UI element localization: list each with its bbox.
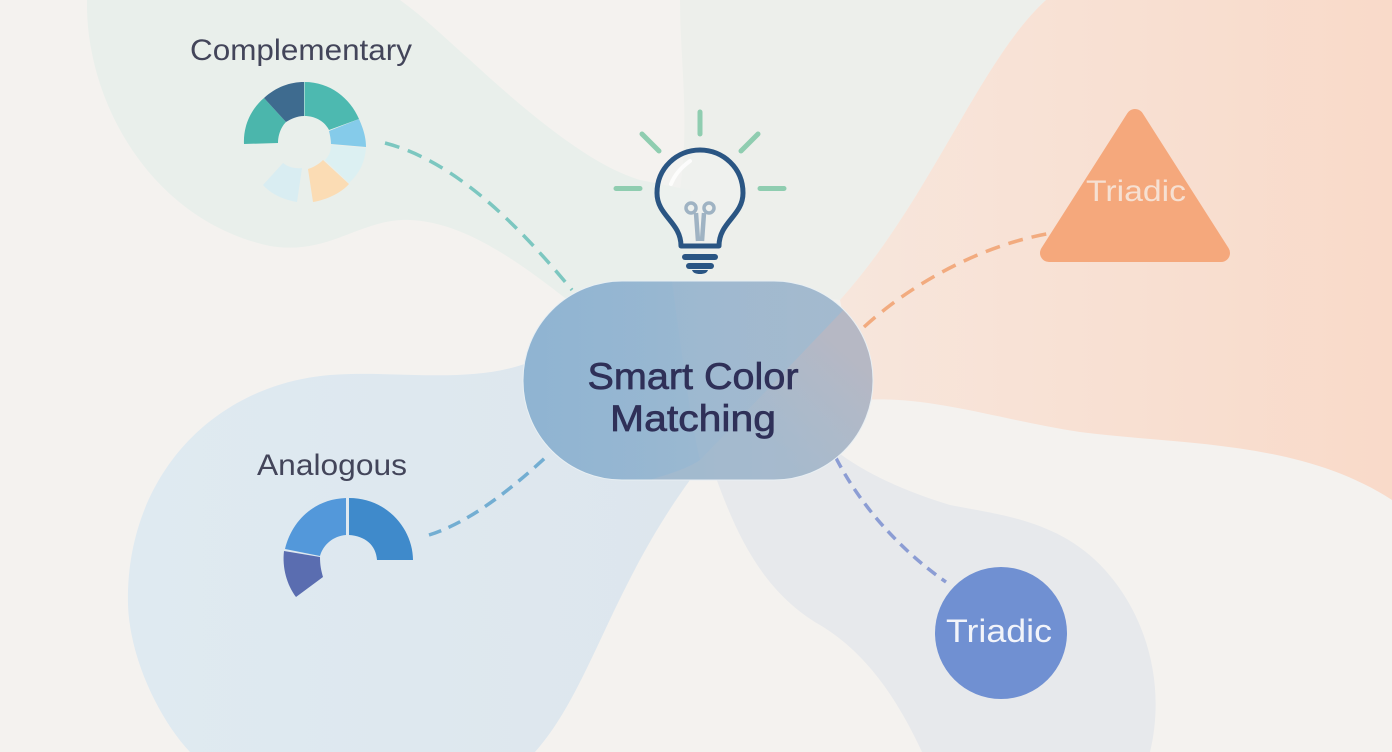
central title [588,356,798,439]
blob: orange right [840,0,1392,500]
node: triadic triangle [1049,118,1221,253]
connector: triadic triangle [864,233,1052,327]
chart: analogous wheel [284,498,413,597]
node: triadic circle [935,567,1067,699]
heading: analogous: Analogous [257,449,407,482]
connector: triadic circle [836,458,946,582]
node: triadic triangle: Triadic [1086,175,1186,208]
central title: Matching [610,398,776,439]
blob: gray-blue bottom right [715,450,1156,752]
chart: complementary wheel [244,82,366,202]
connector: analogous [429,458,545,535]
blob: green top left [87,0,700,300]
central title: Smart Color [588,356,798,397]
node: triadic circle: Triadic [946,613,1052,649]
blob: green top center [680,0,1046,300]
blob: blue bottom left [128,362,690,752]
heading: complementary: Complementary [190,34,412,67]
central pill [523,281,880,480]
connector: complementary [385,143,572,290]
icon: light bulb [616,112,784,274]
